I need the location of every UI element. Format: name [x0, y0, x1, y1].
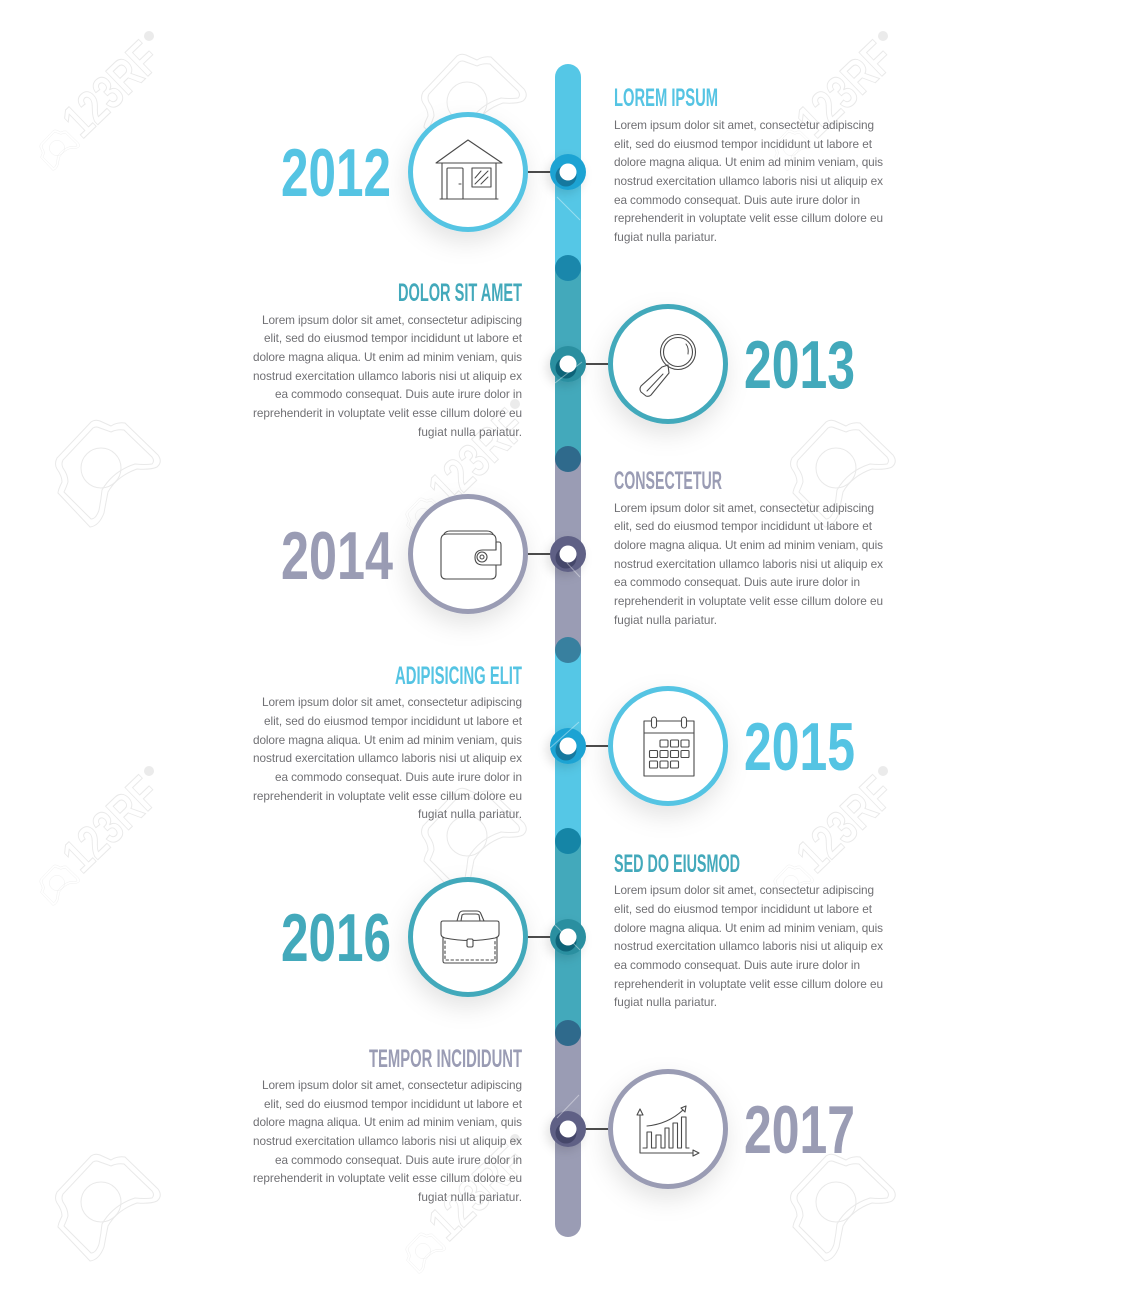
text block 2016: ea commodo consequat. Duis aute irure dolor in: [614, 958, 860, 972]
node 2014: [550, 536, 586, 572]
text block 2013: [253, 313, 523, 439]
node 2016: [550, 919, 586, 955]
node 2012: [550, 154, 586, 190]
timeline infographic: [40, 31, 896, 1274]
text block 2017: nostrud exercitation ullamco laboris nisi ut aliquip ex: [253, 1134, 522, 1148]
text block 2017: Lorem ipsum dolor sit amet, consectetur adipiscing: [262, 1078, 522, 1092]
connector 2012: [527, 171, 556, 173]
text block 2013: elit, sed do eiusmod tempor incididunt ut labore et: [264, 331, 523, 345]
text block 2015: reprehenderit in voluptate velit esse cillum dolore eu: [253, 789, 522, 803]
text block 2013: dolore magna aliqua. Ut enim ad minim veniam, quis: [253, 350, 522, 364]
connector 2017: [580, 1128, 609, 1130]
text block 2013: Lorem ipsum dolor sit amet, consectetur adipiscing: [262, 313, 522, 327]
text block 2012: Lorem ipsum dolor sit amet, consectetur adipiscing: [614, 118, 874, 132]
text block 2016: Lorem ipsum dolor sit amet, consectetur adipiscing: [614, 883, 874, 897]
connector 2014: [527, 553, 556, 555]
node 2015: [550, 728, 586, 764]
text block 2012: nostrud exercitation ullamco laboris nisi ut aliquip ex: [614, 174, 883, 188]
text block 2014: elit, sed do eiusmod tempor incididunt ut labore et: [614, 519, 873, 533]
heading: sed do eiusmod: SED DO EIUSMOD: [614, 850, 740, 878]
heading: dolor sit amet: DOLOR SIT AMET: [398, 279, 522, 307]
connector 2013: [580, 363, 609, 365]
timeline bar: [555, 64, 581, 1237]
icon: growth chart: [637, 1106, 699, 1156]
text block 2016: elit, sed do eiusmod tempor incididunt ut labore et: [614, 902, 873, 916]
text block 2015: [253, 695, 523, 821]
circle 2015: [610, 688, 726, 804]
connector 2015: [580, 745, 609, 747]
text block 2013: fugiat nulla pariatur.: [418, 425, 522, 439]
milestone 2013: [253, 279, 855, 439]
milestone 2014: [281, 467, 883, 627]
text block 2012: dolore magna aliqua. Ut enim ad minim veniam, quis: [614, 155, 883, 169]
circle 2017: [610, 1072, 726, 1186]
text block 2014: Lorem ipsum dolor sit amet, consectetur adipiscing: [614, 501, 874, 515]
year 2013: 2013: [744, 327, 855, 403]
node 2013: [550, 346, 586, 382]
circle 2013: [610, 306, 726, 422]
text block 2016: [614, 883, 883, 1009]
year 2015: 2015: [744, 709, 855, 785]
text block 2014: ea commodo consequat. Duis aute irure dolor in: [614, 575, 860, 589]
text block 2016: fugiat nulla pariatur.: [614, 995, 717, 1009]
circle 2016: [410, 880, 526, 994]
year 2014: 2014: [281, 518, 393, 594]
heading: consectetur: CONSECTETUR: [614, 467, 722, 495]
circle 2014: [410, 496, 526, 612]
text block 2013: ea commodo consequat. Duis aute irure dolor in: [275, 387, 522, 401]
text block 2012: elit, sed do eiusmod tempor incididunt ut labore et: [614, 137, 873, 151]
icon: magnifier: [640, 334, 696, 396]
text block 2017: fugiat nulla pariatur.: [418, 1190, 522, 1204]
text block 2015: elit, sed do eiusmod tempor incididunt ut labore et: [264, 714, 523, 728]
text block 2016: reprehenderit in voluptate velit esse cillum dolore eu: [614, 977, 883, 991]
text block 2017: dolore magna aliqua. Ut enim ad minim veniam, quis: [253, 1115, 522, 1129]
text block 2014: fugiat nulla pariatur.: [614, 613, 717, 627]
icon: wallet: [441, 531, 501, 579]
heading: lorem ipsum: LOREM IPSUM: [614, 84, 718, 112]
text block 2014: [614, 501, 883, 627]
text block 2014: dolore magna aliqua. Ut enim ad minim veniam, quis: [614, 538, 883, 552]
icon: house: [436, 140, 502, 199]
text block 2012: ea commodo consequat. Duis aute irure dolor in: [614, 193, 860, 207]
heading: tempor incididunt: TEMPOR INCIDIDUNT: [369, 1045, 522, 1073]
heading: adipisicing elit: ADIPISICING ELIT: [395, 662, 522, 690]
text block 2015: fugiat nulla pariatur.: [418, 807, 522, 821]
milestone 2017: [253, 1045, 855, 1204]
icon: briefcase: [441, 911, 499, 963]
text block 2012: fugiat nulla pariatur.: [614, 230, 717, 244]
text block 2013: nostrud exercitation ullamco laboris nisi ut aliquip ex: [253, 369, 522, 383]
milestone 2012: [281, 84, 883, 244]
text block 2017: elit, sed do eiusmod tempor incididunt ut labore et: [264, 1097, 523, 1111]
text block 2017: ea commodo consequat. Duis aute irure dolor in: [275, 1153, 522, 1167]
year 2016: 2016: [281, 900, 391, 976]
watermark pattern: [40, 31, 904, 1273]
text block 2015: Lorem ipsum dolor sit amet, consectetur adipiscing: [262, 695, 522, 709]
icon: calendar: [644, 717, 694, 776]
milestone 2016: [281, 850, 883, 1009]
node 2017: [550, 1111, 586, 1147]
year 2012: 2012: [281, 135, 391, 211]
text block 2015: dolore magna aliqua. Ut enim ad minim veniam, quis: [253, 733, 522, 747]
circle 2012: [410, 114, 526, 230]
connector 2016: [527, 936, 556, 938]
text block 2015: nostrud exercitation ullamco laboris nisi ut aliquip ex: [253, 751, 522, 765]
text block 2017: reprehenderit in voluptate velit esse cillum dolore eu: [253, 1171, 522, 1185]
text block 2013: reprehenderit in voluptate velit esse cillum dolore eu: [253, 406, 522, 420]
text block 2012: [614, 118, 883, 244]
text block 2014: reprehenderit in voluptate velit esse cillum dolore eu: [614, 594, 883, 608]
text block 2016: nostrud exercitation ullamco laboris nisi ut aliquip ex: [614, 939, 883, 953]
year 2017: 2017: [744, 1092, 855, 1168]
text block 2015: ea commodo consequat. Duis aute irure dolor in: [275, 770, 522, 784]
text block 2012: reprehenderit in voluptate velit esse cillum dolore eu: [614, 211, 883, 225]
text block 2014: nostrud exercitation ullamco laboris nisi ut aliquip ex: [614, 557, 883, 571]
milestone 2015: [253, 662, 855, 821]
text block 2017: [253, 1078, 523, 1204]
text block 2016: dolore magna aliqua. Ut enim ad minim veniam, quis: [614, 921, 883, 935]
